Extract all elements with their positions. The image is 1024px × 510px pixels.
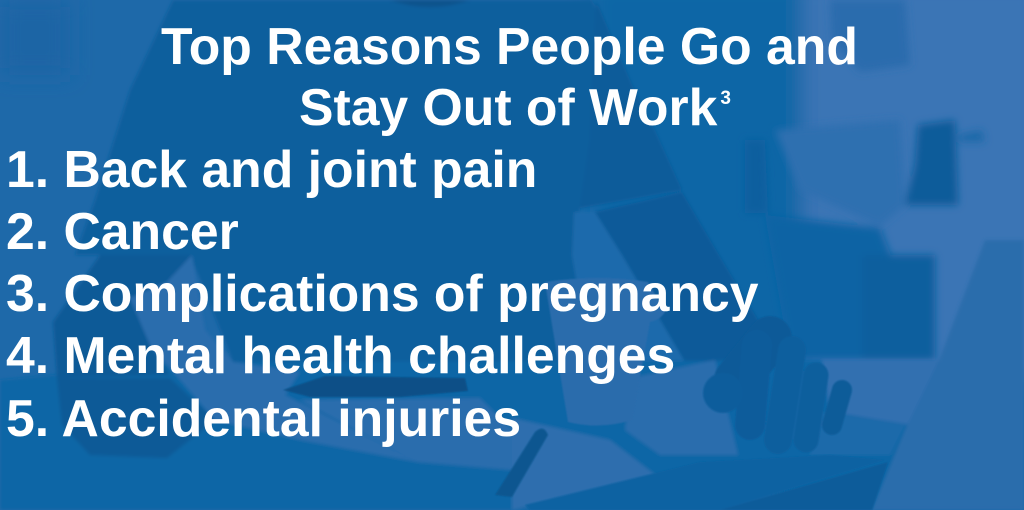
title line 1: Top Reasons People Go and xyxy=(161,17,858,75)
sleeve xyxy=(580,0,682,208)
paper stack xyxy=(625,360,738,455)
reason 3: 3. Complications of pregnancy xyxy=(6,264,758,322)
reason 4: 4. Mental health challenges xyxy=(6,326,675,384)
reason 5: 5. Accidental injuries xyxy=(6,389,521,447)
paper near calculator xyxy=(300,398,512,470)
forearm xyxy=(595,192,770,362)
right-side paper xyxy=(822,360,939,425)
reason 1: 1. Back and joint pain xyxy=(6,140,537,198)
left arm xyxy=(53,255,192,378)
light gap under sleeve xyxy=(572,212,685,362)
hand xyxy=(736,338,842,440)
title xyxy=(161,17,858,136)
laptop xyxy=(525,455,885,510)
title line 2 with superscript: Stay Out of Work3 xyxy=(299,78,731,136)
laptop screen on right xyxy=(872,240,1024,510)
cup xyxy=(545,278,665,426)
calculator xyxy=(283,376,468,397)
torso xyxy=(75,0,682,362)
pen xyxy=(495,429,548,497)
left paper xyxy=(130,255,417,462)
collar shadow xyxy=(390,0,470,7)
list: top reasons xyxy=(6,140,758,447)
reason 2: 2. Cancer xyxy=(6,202,239,260)
table xyxy=(0,360,939,510)
background shelf objects xyxy=(830,0,910,72)
